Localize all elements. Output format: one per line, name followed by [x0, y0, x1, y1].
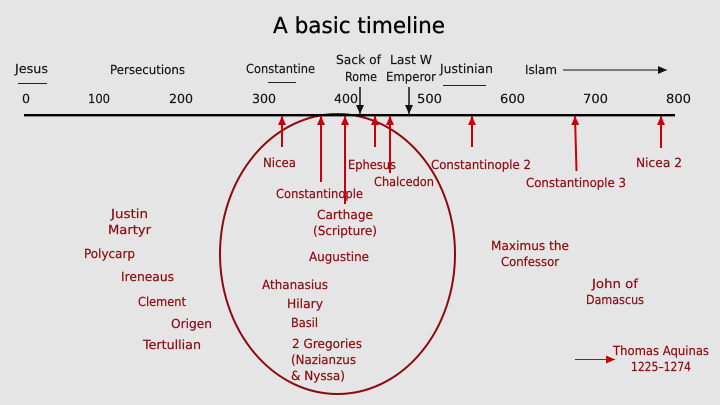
- early figures on the left: Tertullian: [142, 337, 201, 352]
- century labels: 700: [583, 91, 608, 106]
- century labels: [22, 91, 691, 106]
- century labels: 400: [334, 91, 358, 106]
- century labels: 500: [417, 91, 442, 106]
- century labels: 100: [88, 91, 110, 106]
- event: Sack of Rome: [336, 52, 382, 114]
- council labels: Nicea 2: [636, 155, 682, 170]
- event: Sack of Rome: Rome: [345, 69, 377, 84]
- council labels: Carthage: [317, 207, 373, 222]
- council labels: Constantinople: [276, 186, 363, 201]
- era label: Justinian: Justinian: [439, 61, 493, 76]
- later figures on the right: Maximus the: [491, 238, 569, 253]
- later figures on the right: Confessor: [501, 254, 560, 269]
- century labels: 200: [169, 91, 193, 106]
- era label: Islam with arrow: Islam: [525, 62, 557, 77]
- early figures on the left: [84, 206, 212, 352]
- later figures on the right: [491, 238, 644, 307]
- early figures on the left: Polycarp: [84, 246, 135, 261]
- ellipse highlighting the 4th and 5th centuries: [220, 114, 455, 394]
- event: Last W Emperor: Emperor: [386, 69, 437, 84]
- council arrows: [282, 116, 661, 204]
- later figures on the right: John of: [591, 276, 639, 291]
- council labels: [263, 155, 682, 238]
- council labels: Constantinople 2: [431, 157, 531, 172]
- figures inside the ellipse: [262, 249, 369, 383]
- title: A basic timeline: [273, 14, 445, 39]
- century labels: 800: [666, 91, 691, 106]
- century labels: 600: [500, 91, 525, 106]
- timeline axis: [22, 91, 691, 116]
- era label: Jesus: Jesus: [14, 61, 48, 76]
- early figures on the left: Justin: [110, 206, 148, 221]
- era label: Constantine: [246, 61, 315, 82]
- early figures on the left: Clement: [138, 294, 186, 309]
- early figures on the left: Origen: [171, 316, 212, 331]
- event: Sack of Rome: Sack of: [336, 52, 382, 67]
- era label: Jesus: [14, 61, 48, 84]
- figures inside the ellipse: Augustine: [309, 249, 369, 264]
- later figures on the right: Damascus: [586, 292, 644, 307]
- era label: Constantine: Constantine: [246, 61, 315, 76]
- council labels: (Scripture): [313, 223, 377, 238]
- Thomas Aquinas with arrow: Thomas Aquinas: [612, 343, 709, 358]
- event: Last W Emperor: [386, 52, 437, 114]
- Thomas Aquinas with arrow: [575, 343, 709, 374]
- council labels: Nicea: [263, 155, 296, 170]
- era label: Justinian: [439, 61, 493, 86]
- century labels: 300: [252, 91, 276, 106]
- event: Last W Emperor: Last W: [390, 52, 432, 67]
- figures inside the ellipse: & Nyssa): [291, 368, 345, 383]
- council labels: Ephesus: [348, 157, 396, 172]
- era label: Persecutions: Persecutions: [110, 62, 185, 77]
- figures inside the ellipse: Basil: [291, 315, 318, 330]
- Thomas Aquinas with arrow: 1225–1274: [631, 359, 691, 374]
- figures inside the ellipse: (Nazianzus: [291, 352, 356, 367]
- council labels: Constantinople 3: [526, 175, 626, 190]
- early figures on the left: Ireneaus: [121, 269, 174, 284]
- century labels: 0: [22, 91, 30, 106]
- figures inside the ellipse: Athanasius: [262, 277, 328, 292]
- early figures on the left: Martyr: [108, 222, 152, 237]
- council labels: Chalcedon: [374, 174, 434, 189]
- figures inside the ellipse: 2 Gregories: [292, 336, 362, 351]
- figures inside the ellipse: Hilary: [287, 296, 324, 311]
